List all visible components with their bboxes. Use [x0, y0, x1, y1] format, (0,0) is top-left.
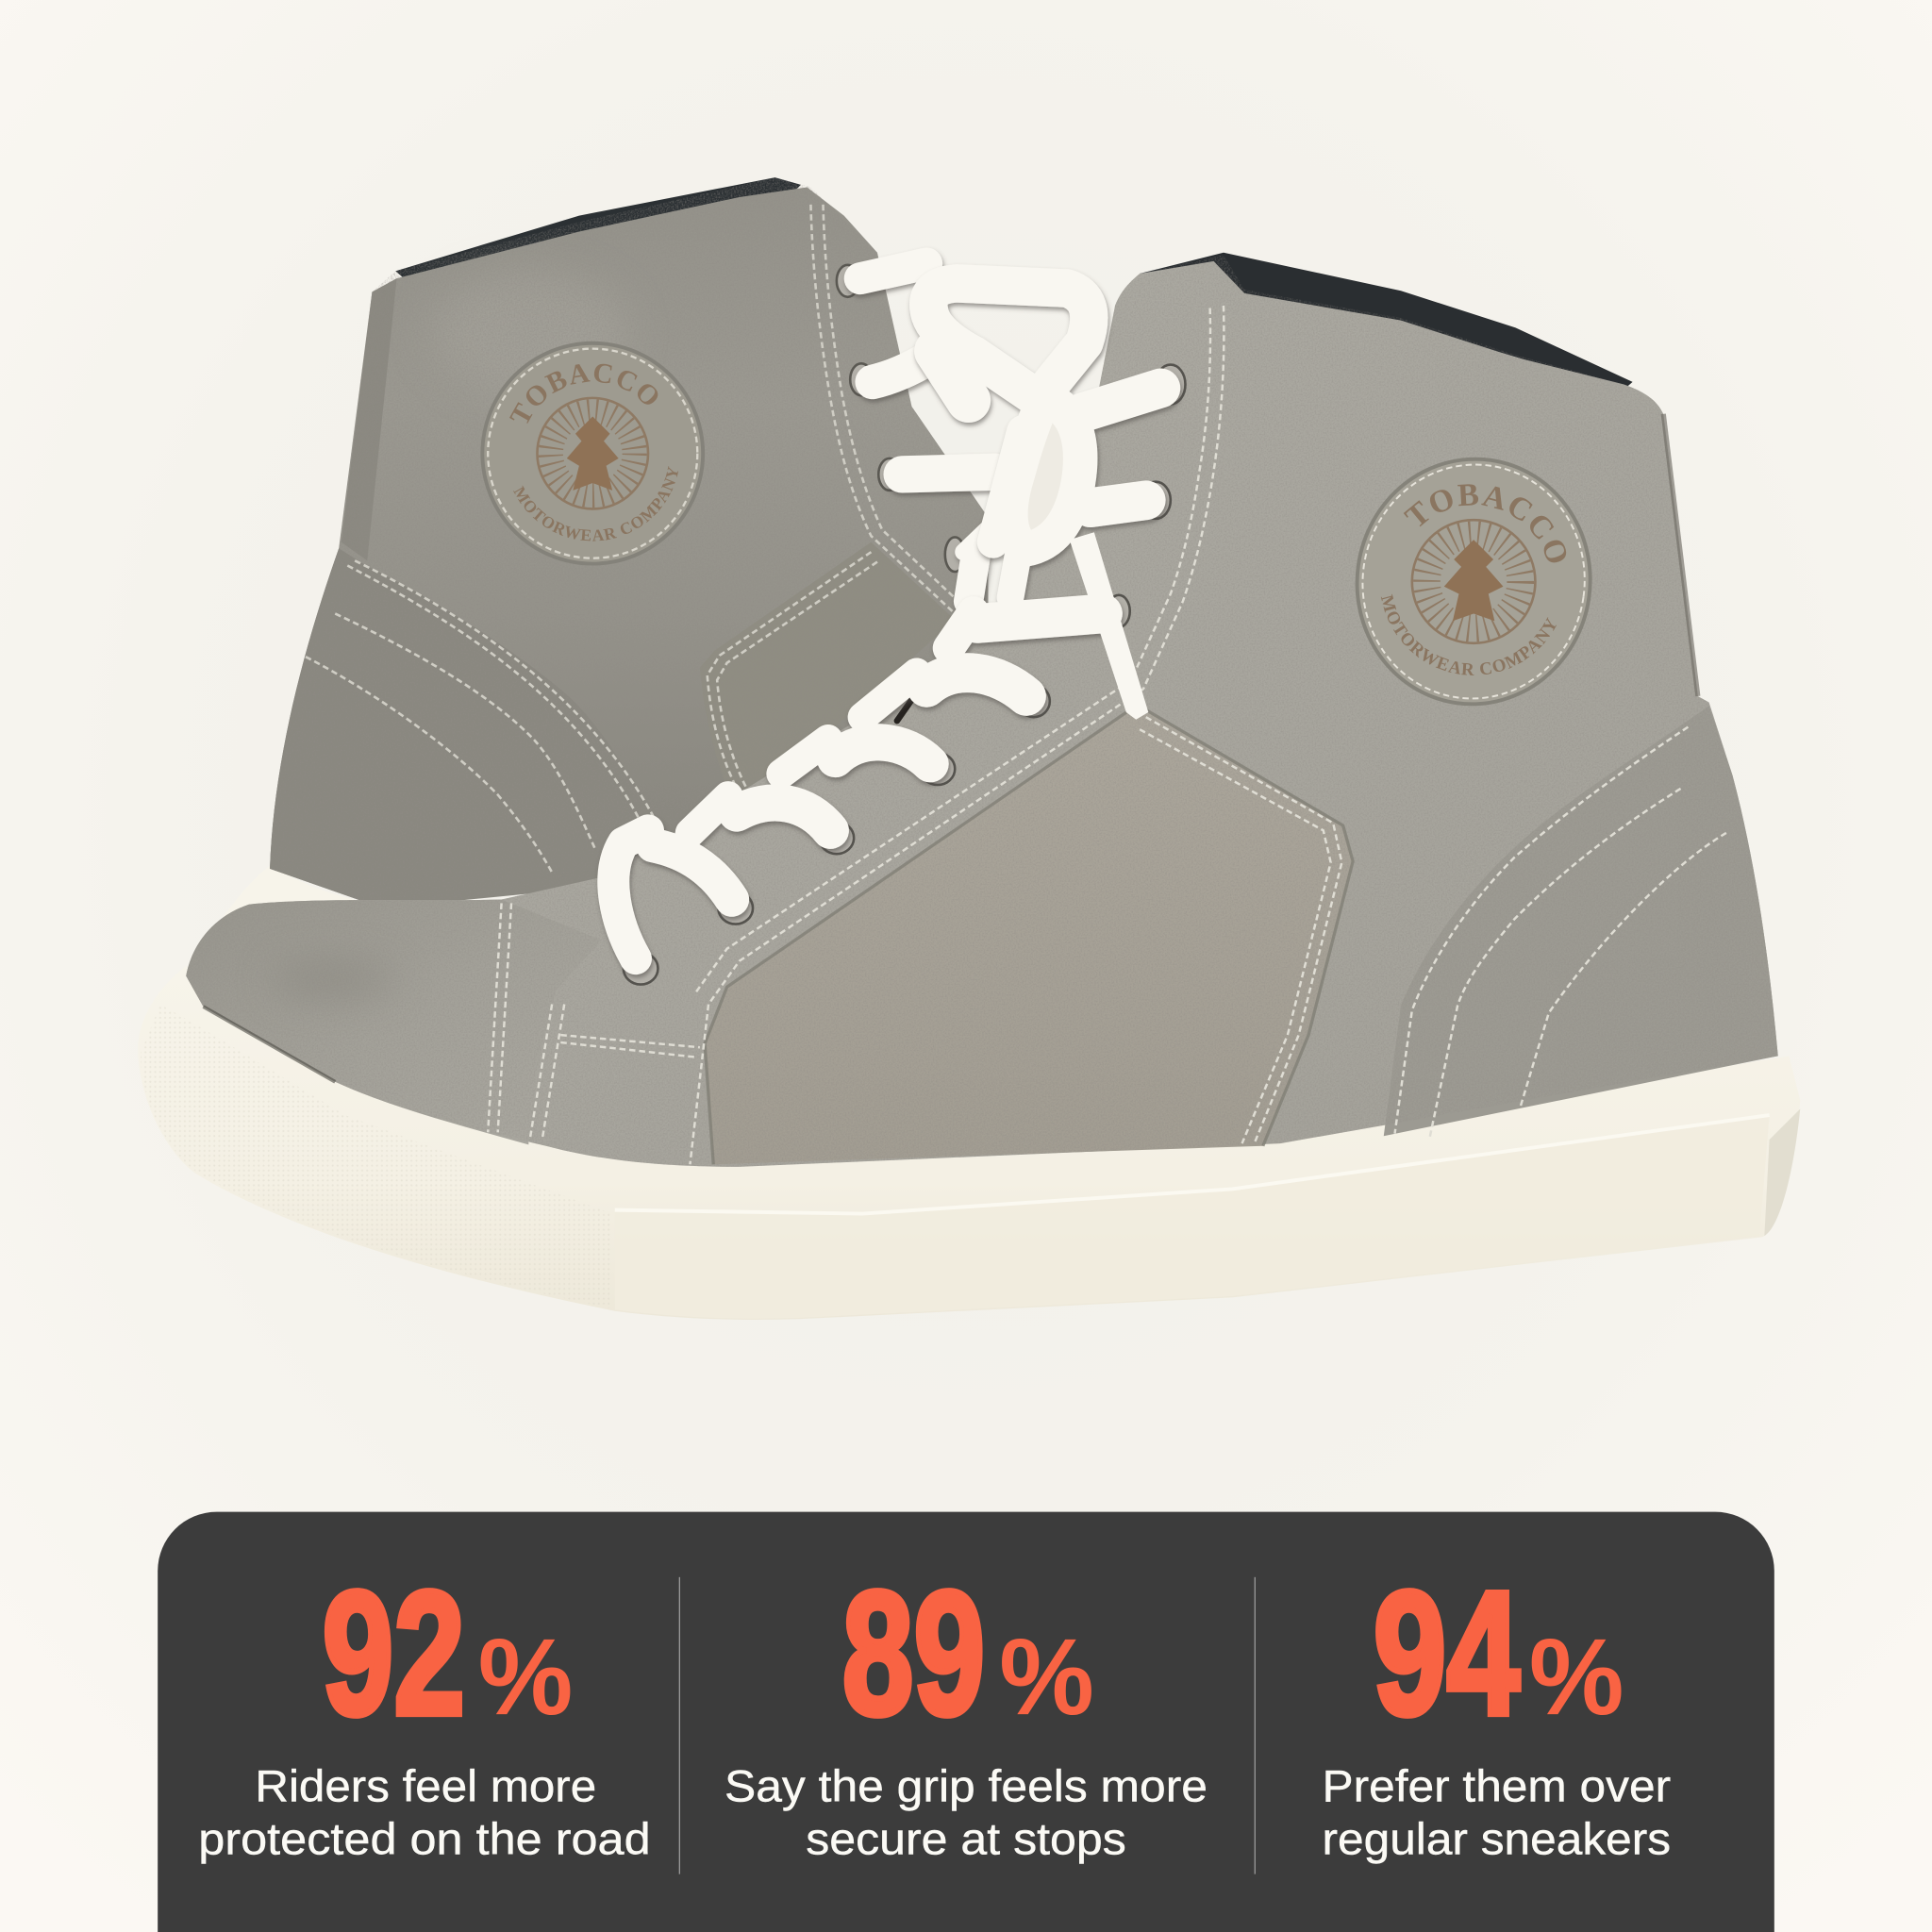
- big loop: [928, 283, 1089, 400]
- caption: riders: protected on the road: [198, 1814, 651, 1864]
- caption: prefer: Prefer them over: [1322, 1761, 1671, 1811]
- heel counter: [1384, 706, 1778, 1136]
- eyelet slits: [715, 696, 914, 816]
- nubuck panel: [705, 705, 1353, 1164]
- scuff on toe: [271, 962, 394, 997]
- caption: riders: Riders feel more: [255, 1761, 596, 1811]
- lace end: [1070, 532, 1148, 720]
- back shoe laces: [860, 264, 995, 601]
- back shoe nubuck panel: [700, 542, 955, 801]
- caption: grip: [724, 1761, 1208, 1864]
- back shoe: [270, 177, 989, 900]
- under-bow laces: [993, 431, 1023, 542]
- caption: grip: Say the grip feels more: [724, 1761, 1208, 1811]
- caption: grip: secure at stops: [806, 1814, 1126, 1864]
- back shoe sole: [185, 865, 407, 974]
- logo patch: front shoe: TOBACCO: [1404, 484, 1566, 562]
- base upper: [186, 261, 1778, 1167]
- toe cap: [186, 899, 601, 1144]
- caption: prefer: [1322, 1761, 1671, 1864]
- stat: 92%: %: [478, 1617, 573, 1738]
- bow loop: [1010, 397, 1080, 550]
- front shoe sole: [141, 1007, 1800, 1320]
- caption: riders: [198, 1761, 651, 1864]
- back shoe grain: [340, 177, 974, 545]
- back shoe mottling: [431, 271, 628, 394]
- logo patch: front shoe: [1355, 457, 1592, 706]
- caption: prefer: regular sneakers: [1322, 1814, 1671, 1864]
- seam highlight: [615, 1115, 1770, 1214]
- tread texture at heel: [1764, 1109, 1800, 1236]
- logo patch: back shoe: MOTORWEAR COMPANY: [513, 466, 678, 541]
- stat: 94%: 94: [1374, 1555, 1520, 1752]
- stitching: [488, 306, 1726, 1164]
- back shoe upper: [270, 188, 989, 908]
- divider: [1255, 1577, 1256, 1874]
- sole join shadow: [204, 1007, 335, 1082]
- stat: 94%: %: [1529, 1617, 1624, 1738]
- foxing band: [615, 1115, 1770, 1319]
- grain: [300, 255, 1723, 1166]
- upper bars: [1091, 500, 1146, 508]
- tread texture at toe: [141, 1008, 609, 1298]
- front shoe eyelets: [624, 365, 1185, 985]
- front shoe laces: [613, 283, 1160, 958]
- stats panel: [158, 1512, 1774, 1932]
- logo patch: front shoe: MOTORWEAR COMPANY: [1381, 594, 1557, 675]
- nubuck panel edge: [705, 705, 1353, 1164]
- front shoe upper: [173, 246, 1799, 1183]
- stat: 89%: %: [999, 1617, 1094, 1738]
- back shoe heel counter: [270, 548, 696, 908]
- stat: 92%: 92: [323, 1555, 465, 1752]
- collar lining: [1140, 253, 1633, 390]
- back shoe collar lining: [395, 177, 801, 286]
- back shoe stitching: [306, 205, 963, 873]
- lower crossings: [690, 796, 728, 833]
- stat: 89%: 89: [842, 1555, 985, 1752]
- divider: [679, 1577, 680, 1874]
- back shoe eyelets: [837, 265, 965, 572]
- logo patch: back shoe: TOBACCO: [509, 364, 658, 424]
- logo patch: back shoe: [481, 341, 705, 566]
- back shoe collar side: [341, 278, 397, 560]
- flap edge line: [1663, 414, 1698, 696]
